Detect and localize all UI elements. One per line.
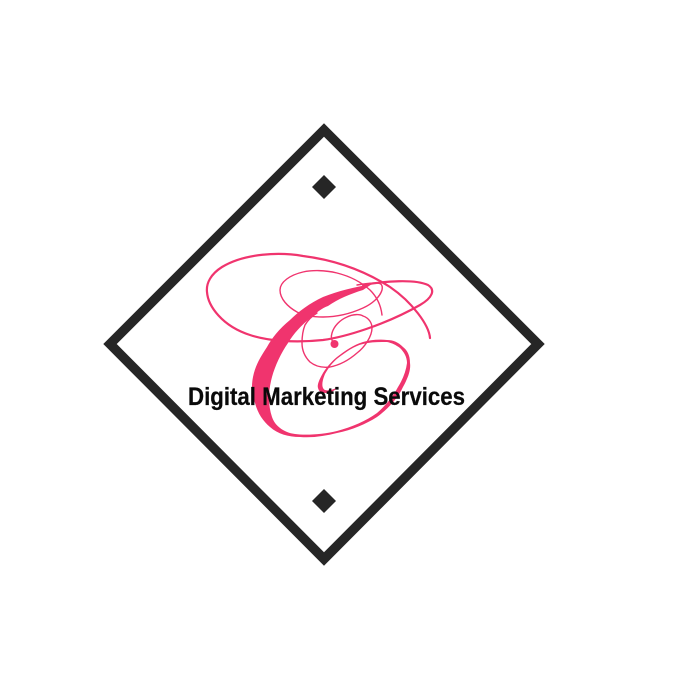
pink script letter C monogram [207, 254, 432, 437]
curl dot [330, 340, 338, 348]
outer swash [207, 254, 432, 341]
small curl [302, 313, 372, 367]
inner loop [280, 271, 382, 317]
diamond frame [110, 130, 538, 559]
icon: top small diamond [312, 175, 336, 199]
icon: bottom small diamond [312, 489, 336, 513]
thick C body [252, 284, 410, 437]
brand name text: Digital Marketing Services [188, 383, 465, 411]
